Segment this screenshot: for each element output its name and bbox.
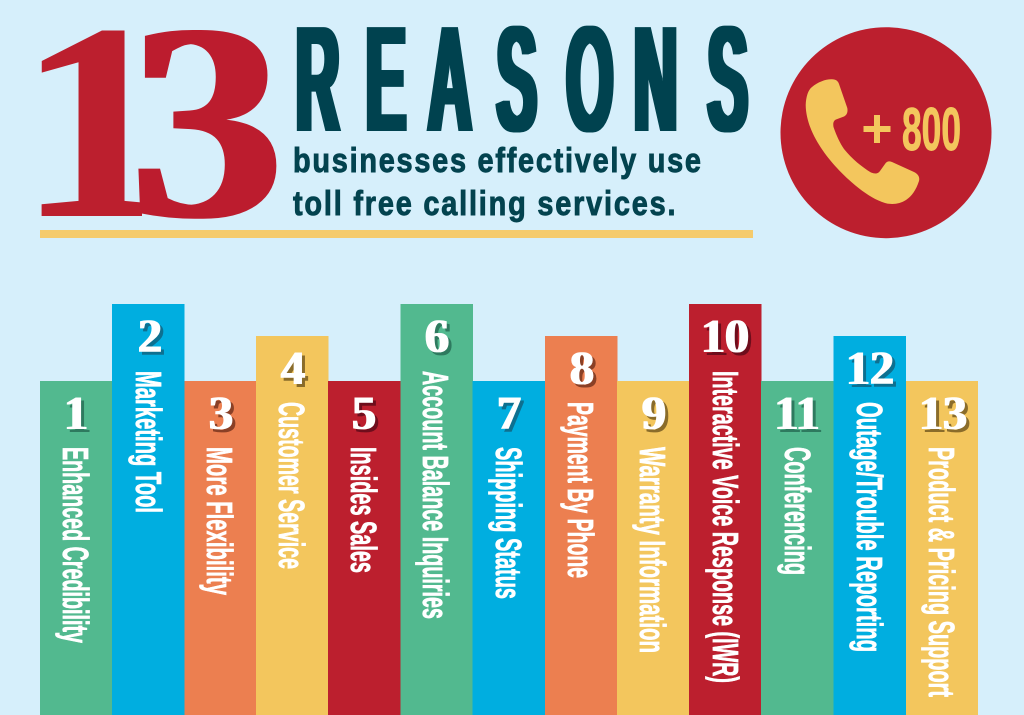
bar 2: 2 [141, 313, 165, 366]
bar 2: Marketing Tool [128, 371, 169, 513]
bar 11: 11 [777, 390, 823, 443]
bar 7 [472, 381, 545, 715]
bar 7: 7 [497, 387, 521, 440]
bar 13 [906, 381, 978, 715]
bar 9: 9 [642, 387, 666, 440]
bar 3 [184, 381, 256, 715]
bar 9: 9 [645, 390, 669, 443]
bar 6: 6 [425, 310, 449, 363]
bar 7: Shipping Status [488, 447, 529, 599]
bar 6: 6 [428, 313, 452, 366]
bar 6 [400, 304, 473, 715]
subtitle: toll free calling services. [293, 184, 676, 223]
bar 5: Insides Sales [343, 447, 384, 573]
bar 4: 4 [284, 345, 308, 398]
bar 8: 8 [570, 342, 594, 395]
bar 2: 2 [138, 310, 162, 363]
bar 12: 12 [846, 342, 894, 395]
bar 12 [834, 336, 906, 715]
subtitle [293, 141, 701, 223]
bar 1: 1 [64, 387, 88, 440]
plus sign [864, 115, 890, 143]
icon: phone circle [780, 27, 992, 238]
bar 2 [112, 304, 184, 715]
bar 3: 3 [209, 387, 233, 440]
bar 11: Conferencing [777, 447, 818, 575]
bar 11: 11 [774, 387, 820, 440]
bar 5: 5 [352, 387, 376, 440]
bar 12: 12 [849, 345, 897, 398]
bar 1: 1 [67, 390, 91, 443]
bar 7: 7 [500, 390, 524, 443]
bar 9 [617, 381, 690, 715]
bar 4: 4 [281, 342, 305, 395]
subtitle: businesses effectively use [293, 141, 701, 180]
bar 10: 10 [704, 313, 752, 366]
text: 800: 800 [902, 96, 961, 163]
bar 4 [256, 336, 328, 715]
bar 11 [761, 381, 834, 715]
title: big number 13 [42, 30, 276, 219]
bar 5: 5 [355, 390, 379, 443]
bar 13: 13 [922, 390, 970, 443]
bar 10: 10 [701, 310, 749, 363]
underline [40, 230, 753, 238]
bar 5 [328, 381, 400, 715]
bar 8 [545, 336, 618, 715]
bar 3: 3 [212, 390, 236, 443]
bar 8: 8 [573, 345, 597, 398]
bar 1 [40, 381, 112, 715]
bar 13: 13 [919, 387, 967, 440]
bar 3: More Flexibility [199, 447, 240, 595]
title: REASONS: REASONS [296, 0, 748, 164]
bar 10 [689, 304, 762, 715]
bar 4: Customer Service [271, 402, 312, 569]
